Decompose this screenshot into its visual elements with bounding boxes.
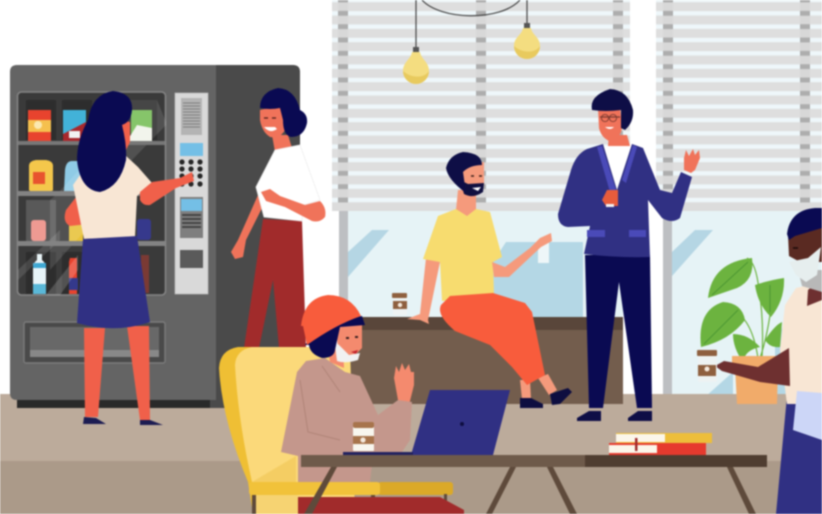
- trousers: [298, 497, 464, 514]
- chair arm front: [249, 482, 380, 495]
- coin slot: [180, 250, 203, 268]
- smile: [605, 127, 614, 129]
- vending machine: [10, 65, 300, 408]
- legs: [84, 328, 105, 417]
- cream shirt: [780, 282, 822, 404]
- blinds: left: [332, 0, 630, 211]
- floor: [0, 394, 822, 514]
- lower legs: [520, 380, 531, 399]
- machine front: [10, 65, 216, 400]
- neck: [798, 270, 822, 292]
- face: [458, 162, 484, 195]
- face sliver: [116, 120, 130, 158]
- plant: [700, 258, 784, 404]
- shirt: [73, 155, 152, 239]
- clipboard paper: [793, 391, 822, 440]
- left arm: [231, 195, 266, 259]
- coffee cup: on bench: [392, 293, 407, 315]
- shirt: [423, 209, 502, 301]
- window: left: [339, 205, 623, 397]
- machine base: [17, 398, 242, 408]
- glass glare: [50, 100, 166, 270]
- shoes: [577, 411, 601, 421]
- smile: [264, 127, 277, 131]
- chair legs: [252, 494, 447, 514]
- right arm: [492, 233, 552, 277]
- neck: [327, 345, 344, 368]
- trousers: [776, 396, 822, 514]
- eye: [793, 247, 798, 249]
- collar shadow: [807, 278, 822, 306]
- raised hand and arm: [394, 363, 414, 405]
- trousers: [585, 255, 652, 408]
- white shirt: [256, 145, 320, 221]
- payment terminal: [180, 197, 203, 238]
- orange cap: [301, 295, 361, 345]
- eyes and mouth: [346, 337, 358, 338]
- person: woman at machine: [65, 91, 194, 425]
- long hair: [77, 91, 132, 192]
- hair: [305, 316, 365, 358]
- display case: [18, 92, 166, 295]
- person: man in blue suit: [558, 89, 700, 421]
- hair: [592, 89, 633, 130]
- person: colleague at right edge: [697, 208, 822, 514]
- table legs: [304, 467, 756, 514]
- keypad: [179, 159, 203, 187]
- person: woman in white shirt: [231, 88, 325, 348]
- face: [336, 322, 362, 362]
- face: [260, 105, 285, 137]
- shoes: [83, 417, 106, 424]
- stacked books: [609, 433, 712, 455]
- cup hand: [602, 190, 618, 206]
- skirt: [77, 236, 150, 328]
- hair: [787, 208, 822, 240]
- pants: [244, 219, 306, 348]
- orange pants: [440, 293, 545, 385]
- neck: [456, 190, 476, 218]
- coffee cup: on table: [353, 422, 374, 451]
- pendant lamps: [403, 0, 540, 84]
- armchair back: [219, 347, 355, 514]
- hoodie folds: [300, 366, 340, 440]
- eyes: [471, 175, 482, 177]
- reaching arm: [140, 172, 194, 205]
- person: seated with laptop: [281, 295, 464, 514]
- glasses: [600, 116, 620, 118]
- lamp: right bulb: [514, 0, 540, 59]
- leaves: [708, 258, 752, 298]
- face: [598, 106, 622, 141]
- forearm: [261, 189, 325, 222]
- chair arm rear: [378, 482, 453, 495]
- stems: [735, 258, 772, 358]
- coffee table: [301, 455, 767, 514]
- blinds: right: [656, 0, 822, 211]
- window: right: [663, 205, 822, 404]
- bench: [348, 317, 623, 404]
- mask: [789, 247, 821, 282]
- smile: [472, 187, 481, 191]
- pickup tray: [24, 322, 165, 363]
- mask: [335, 344, 360, 362]
- hair: [446, 152, 482, 193]
- arm: [715, 348, 790, 386]
- hoodie: [281, 358, 412, 482]
- far arm: [65, 192, 88, 226]
- control panel: [175, 93, 208, 294]
- snack items: [28, 110, 152, 294]
- jacket details: [597, 145, 637, 192]
- table top: [301, 455, 585, 467]
- beard: [460, 180, 484, 196]
- shelves: [18, 141, 165, 145]
- raised hand: [684, 149, 700, 173]
- face: [788, 225, 822, 262]
- pot: [732, 356, 778, 404]
- eyes: [264, 117, 276, 119]
- left arm: [407, 258, 440, 324]
- shirt collar: [602, 146, 633, 190]
- lamp: left bulb: [403, 0, 429, 84]
- neck: [608, 135, 630, 155]
- hair: [260, 88, 307, 137]
- jacket: [558, 144, 692, 257]
- leaf veins: [704, 262, 770, 344]
- shoes: [520, 398, 543, 408]
- neck: [272, 135, 292, 152]
- machine side: [210, 65, 300, 408]
- coffee cup: held: [697, 350, 717, 382]
- laptop: [343, 390, 510, 456]
- person: bearded man: [407, 152, 572, 408]
